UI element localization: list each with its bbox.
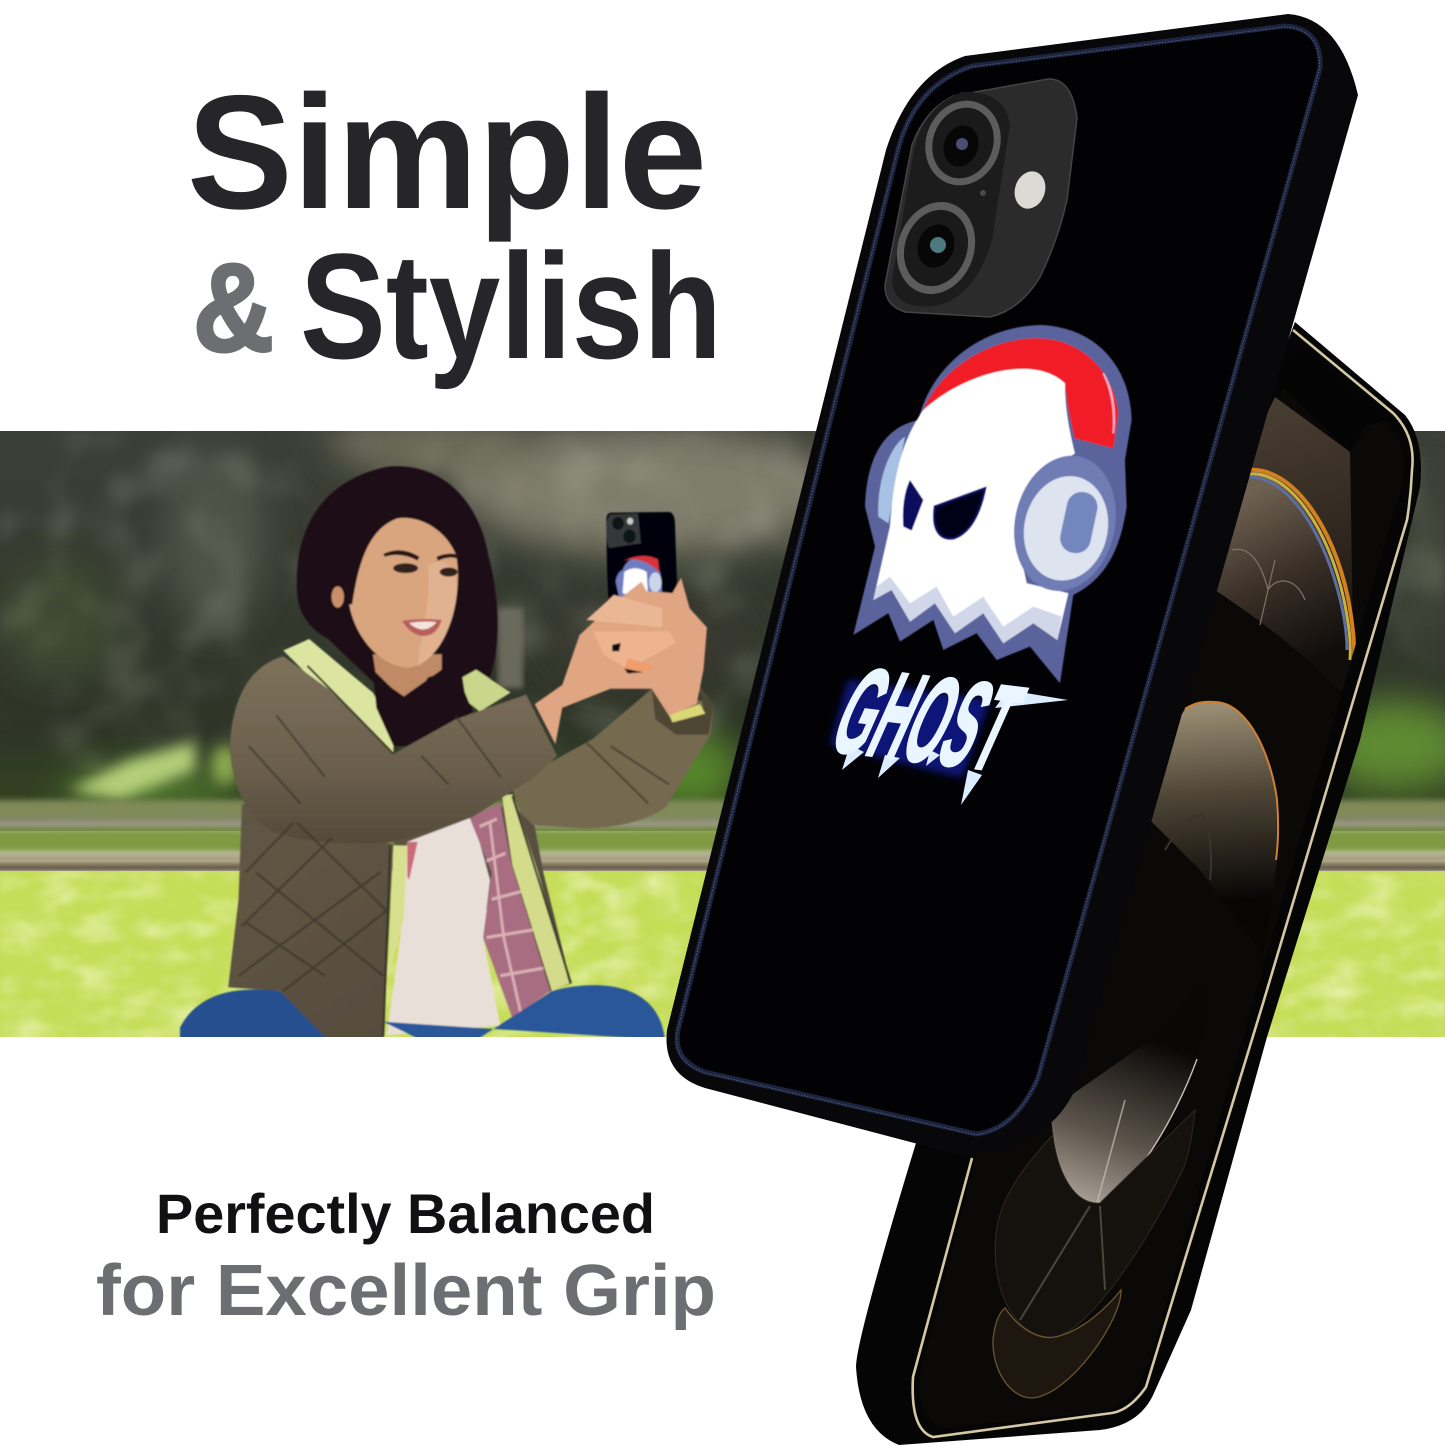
hair fringe bbox=[346, 512, 458, 606]
jacket body bbox=[228, 804, 571, 1040]
dark hair locks over neck bbox=[373, 670, 473, 746]
subtitle: Perfectly Balanced for Excellent Grip bbox=[96, 1182, 716, 1331]
lawn and path bbox=[0, 800, 1445, 1041]
lower swirl streak bbox=[1097, 1100, 1125, 1203]
small crossing arcs bbox=[1232, 549, 1305, 625]
inner swirl tip bbox=[1164, 838, 1212, 880]
front phone: black case bbox=[666, 14, 1358, 1155]
ghost body bbox=[873, 369, 1075, 643]
lit screen wedge bbox=[1250, 397, 1352, 627]
rainbow swirl bbox=[1217, 472, 1339, 658]
face bbox=[347, 514, 458, 668]
left ear cup bbox=[878, 437, 905, 523]
ghost logo bbox=[853, 325, 1132, 683]
case outer shell bbox=[666, 14, 1358, 1155]
big swirl rim bbox=[1185, 702, 1278, 860]
heading ampersand: & bbox=[193, 239, 274, 378]
diagonal glow bbox=[1020, 1206, 1105, 1320]
microphone dot bbox=[980, 190, 986, 196]
case edge band bbox=[677, 26, 1320, 1134]
quilting lines bbox=[239, 716, 669, 991]
hands bbox=[535, 578, 707, 744]
jacket zipper bbox=[307, 666, 571, 1037]
jeans left bbox=[180, 990, 328, 1040]
flash bbox=[1010, 167, 1050, 213]
lens bottom bbox=[884, 191, 988, 305]
wallpaper swirls bbox=[993, 397, 1354, 1398]
back phone body bbox=[856, 322, 1421, 1445]
gold frame line bbox=[913, 330, 1413, 1437]
mouth bbox=[402, 619, 442, 636]
collar bbox=[283, 639, 394, 754]
phone in hand bbox=[606, 512, 678, 610]
far arm sleeve bbox=[511, 689, 714, 828]
middle ellipse bbox=[995, 1110, 1195, 1337]
wrist band bbox=[669, 704, 705, 722]
camera capsule bbox=[892, 92, 1010, 306]
park background trees bbox=[0, 415, 1445, 831]
lower swirl rim bbox=[1053, 1059, 1197, 1203]
right ear cup bbox=[1002, 446, 1128, 601]
rainbow arc bands bbox=[1246, 470, 1354, 670]
jeans right bbox=[383, 985, 665, 1040]
heading line: Simple: Simple bbox=[187, 62, 707, 243]
bright shrub bbox=[70, 742, 239, 800]
plaid shirt bbox=[407, 804, 550, 1018]
lower bright swirl bbox=[1052, 1048, 1192, 1202]
cuff far bbox=[652, 685, 714, 735]
ear bbox=[332, 586, 344, 608]
subtitle line 2: for Excellent Grip bbox=[96, 1251, 716, 1331]
photo band: park scene bbox=[0, 415, 1445, 1041]
subtitle line 1: Perfectly Balanced bbox=[156, 1182, 655, 1245]
right eye bbox=[934, 488, 985, 538]
wordmark navy backing bbox=[830, 680, 990, 778]
ghost glow outline bbox=[853, 325, 1132, 683]
camera plate bbox=[885, 79, 1077, 317]
hair back bbox=[297, 466, 498, 746]
camera module bbox=[884, 79, 1077, 317]
eyes and brows bbox=[383, 550, 458, 561]
shirt bbox=[387, 817, 500, 1035]
lamp post bbox=[498, 608, 523, 688]
GHOST wordmark: GHOST bbox=[815, 643, 1041, 796]
lens top bbox=[914, 90, 1012, 196]
bottom ellipse bbox=[993, 1290, 1121, 1398]
near arm sleeve bbox=[230, 656, 557, 843]
ghost hem shading bbox=[873, 577, 1062, 643]
headband bbox=[923, 338, 1118, 448]
woman taking a selfie bbox=[180, 466, 714, 1040]
case edge stitch highlight bbox=[676, 27, 1320, 1135]
back phone notch bbox=[1275, 345, 1385, 452]
headband highlight bbox=[1103, 373, 1114, 433]
title: Simple & Stylish bbox=[187, 62, 722, 390]
neck bbox=[373, 654, 442, 696]
back phone: screen side bbox=[856, 322, 1421, 1445]
back phone screen bbox=[919, 345, 1404, 1428]
left eye bbox=[903, 480, 923, 531]
GHOST wordmark bbox=[815, 643, 1068, 805]
heading line: Stylish: Stylish bbox=[300, 222, 722, 390]
jacket lining bbox=[502, 794, 569, 991]
big swirl bbox=[1152, 702, 1277, 885]
wordmark drips bbox=[842, 690, 1068, 805]
